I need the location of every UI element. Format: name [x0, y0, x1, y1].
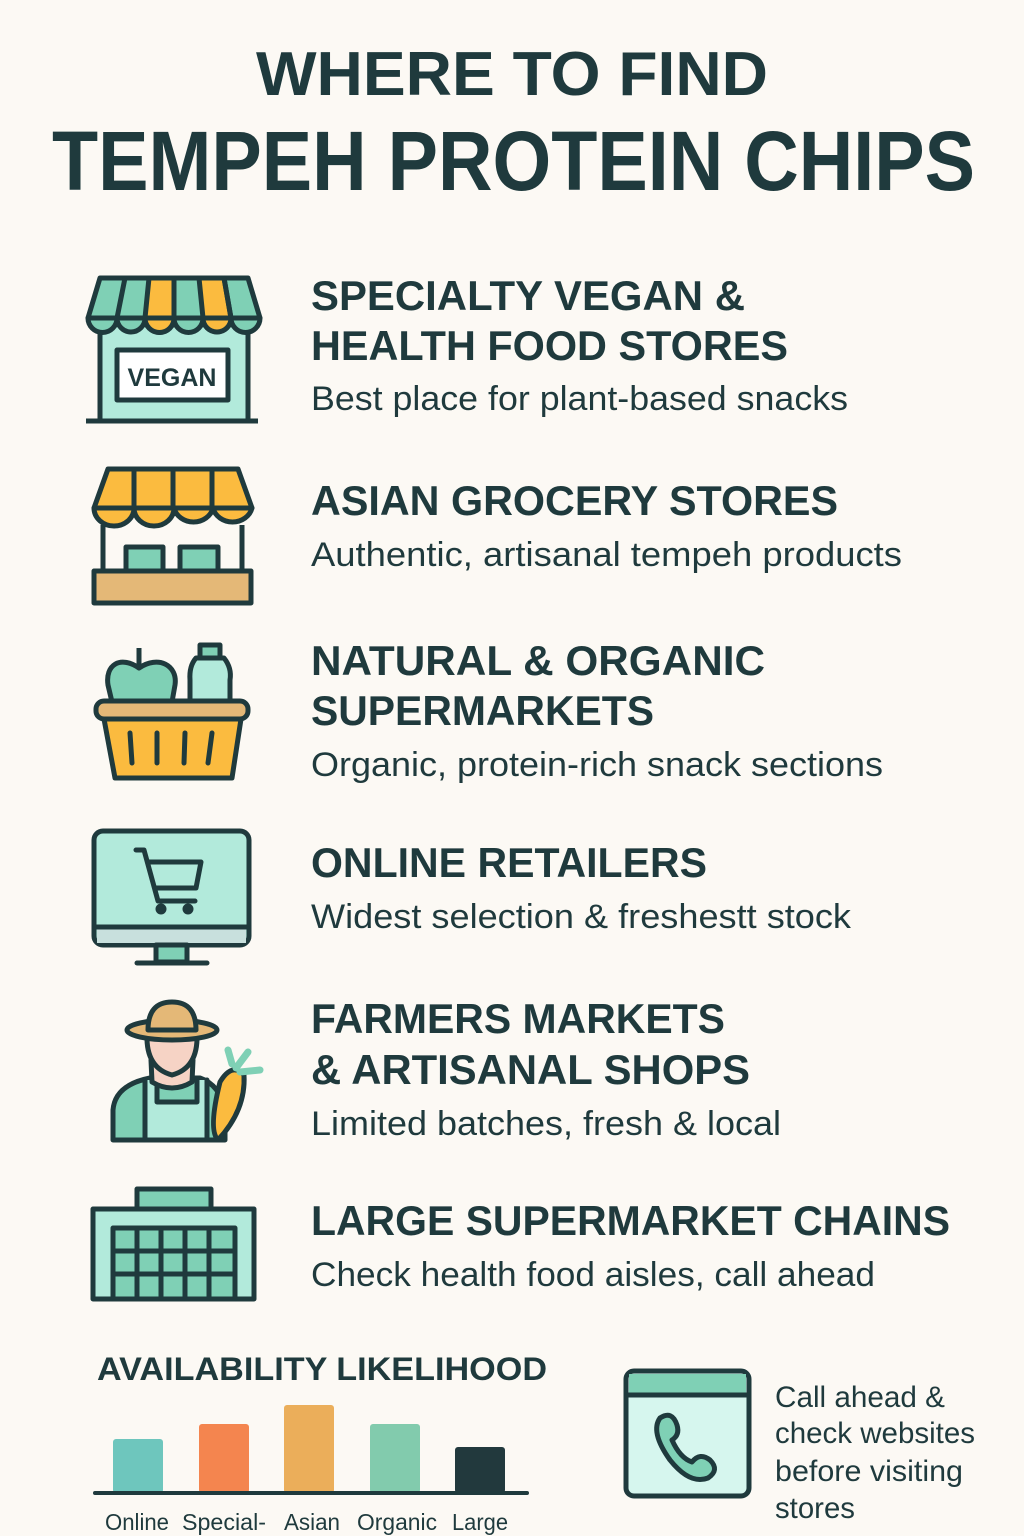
heading: natural organic: SUPERMARKETS: [311, 687, 654, 734]
icon: supermarket building: [93, 1189, 254, 1299]
heading: large supermarket: [311, 1197, 950, 1294]
callout text: check websites: [775, 1417, 975, 1450]
heading: specialty vegan: SPECIALTY VEGAN &: [311, 272, 745, 319]
heading: large supermarket: LARGE SUPERMARKET CHAINS: [311, 1197, 950, 1244]
callout text: before visiting: [775, 1455, 963, 1488]
title: [52, 40, 975, 208]
heading: online: Widest selection & freshestt stock: [311, 898, 852, 936]
callout text: Call ahead &: [775, 1381, 945, 1414]
heading: asian grocery: ASIAN GROCERY STORES: [311, 477, 838, 524]
bar chart: Asian: [284, 1509, 340, 1535]
heading: large supermarket: Check health food aisles, call ahead: [311, 1256, 875, 1294]
icon: farmer: [113, 1002, 260, 1140]
chart title: AVAILABILITY LIKELIHOOD: [97, 1351, 547, 1387]
bar chart: [95, 1405, 527, 1535]
bar chart: Large: [452, 1509, 508, 1535]
heading: specialty vegan: [311, 272, 848, 418]
callout text: stores: [775, 1492, 855, 1525]
callout text: [775, 1381, 975, 1525]
heading: natural organic: [311, 637, 883, 784]
heading: online: [311, 839, 852, 936]
icon: vegan store: [86, 278, 260, 421]
heading: natural organic: Organic, protein-rich snack sections: [311, 746, 883, 784]
heading: farmers markets: FARMERS MARKETS: [311, 995, 725, 1042]
heading: asian grocery: [311, 477, 902, 574]
icon: computer cart: [94, 831, 249, 963]
icon: basket: [96, 645, 248, 778]
title: WHERE TO FIND: [256, 40, 768, 109]
icon: asian market stall: [94, 469, 252, 603]
heading: asian grocery: Authentic, artisanal tempeh products: [311, 536, 902, 574]
icon: vegan store: VEGAN: [128, 364, 216, 392]
heading: online: ONLINE RETAILERS: [311, 839, 707, 886]
bar chart: Online: [105, 1509, 169, 1535]
bar chart: Organic: [357, 1509, 437, 1535]
heading: farmers markets: [311, 995, 781, 1143]
icon: phone card: [626, 1371, 749, 1496]
heading: natural organic: NATURAL & ORGANIC: [311, 637, 765, 684]
heading: specialty vegan: HEALTH FOOD STORES: [311, 322, 788, 369]
heading: farmers markets: Limited batches, fresh & local: [311, 1105, 781, 1143]
heading: farmers markets: & ARTISANAL SHOPS: [311, 1046, 750, 1093]
heading: specialty vegan: Best place for plant-based snacks: [311, 380, 848, 418]
bar chart: Special-: [182, 1509, 266, 1535]
